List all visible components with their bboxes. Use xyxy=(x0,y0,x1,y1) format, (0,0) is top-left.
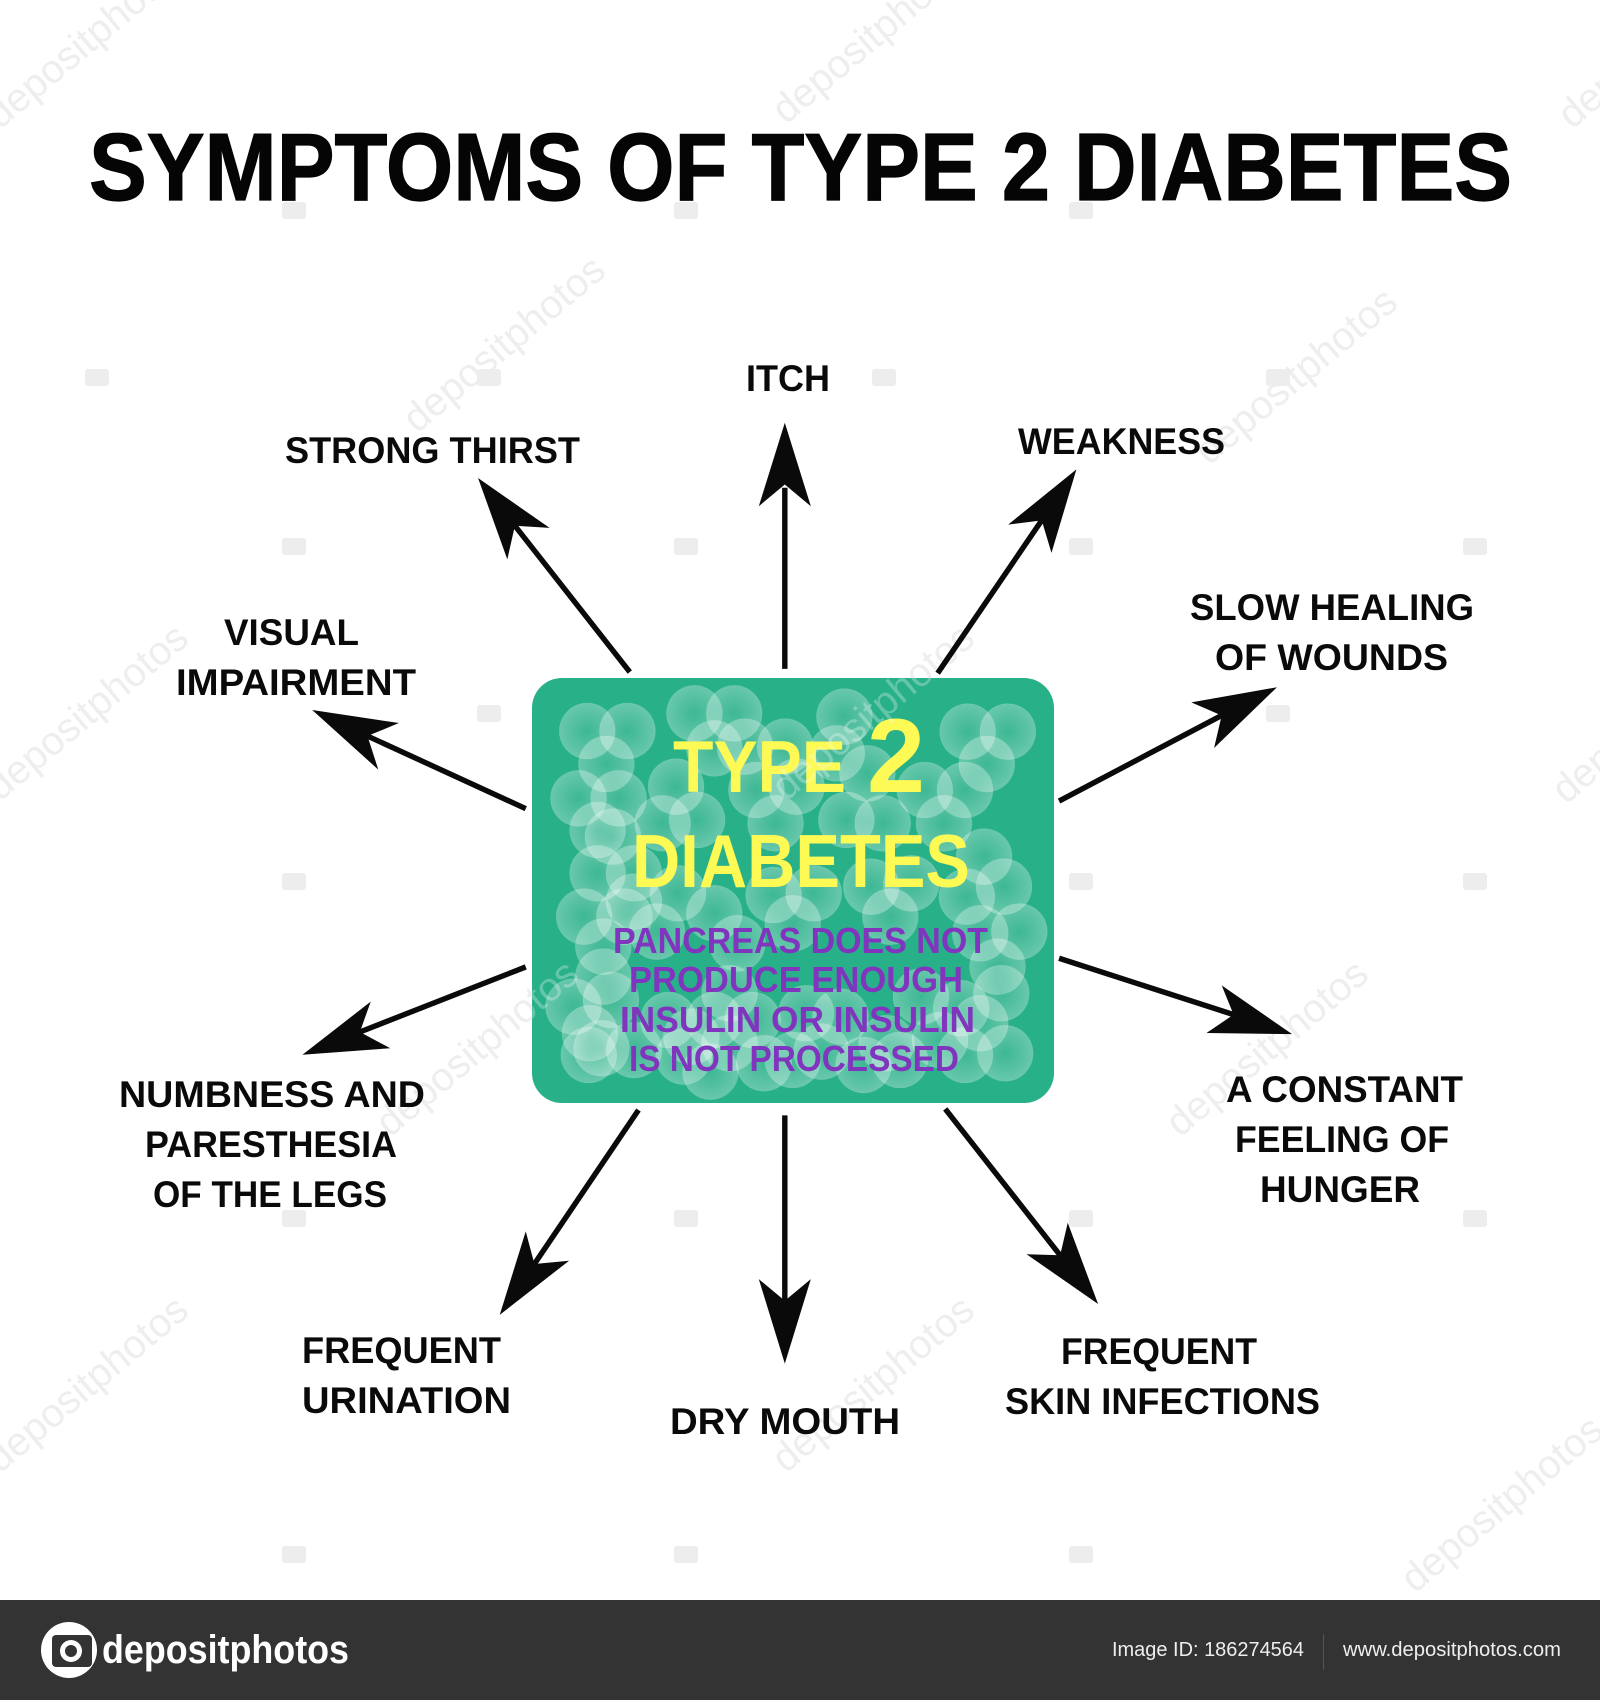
panel heading: TYPE xyxy=(673,727,846,808)
label: a constant feeling of hunger: A CONSTANT xyxy=(1226,1069,1463,1110)
watermark pattern: depositphotos xyxy=(368,951,587,1145)
label: strong thirst: STRONG THIRST xyxy=(285,430,580,471)
label: visual impairment: IMPAIRMENT xyxy=(176,662,416,703)
arrow: dry mouth xyxy=(759,1115,811,1364)
panel description xyxy=(613,920,988,1079)
label: slow healing of wounds: SLOW HEALING xyxy=(1190,587,1474,628)
icon: camera logo xyxy=(41,1622,97,1678)
label: a constant feeling of hunger: HUNGER xyxy=(1260,1169,1420,1210)
arrow: strong thirst xyxy=(478,478,630,672)
panel description: PANCREAS DOES NOT xyxy=(613,920,988,961)
label: a constant feeling of hunger: FEELING OF xyxy=(1235,1119,1449,1160)
label: a constant feeling of hunger xyxy=(1226,1069,1463,1210)
watermark pattern: depositphotos xyxy=(1187,279,1406,473)
panel heading: 2 xyxy=(867,698,925,815)
arrow: itch xyxy=(759,423,811,669)
panel watermark: depositphotos xyxy=(764,615,983,809)
panel description: PRODUCE ENOUGH xyxy=(629,959,963,1000)
label: numbness and paresthesia of the legs: OF THE LEGS xyxy=(153,1174,387,1215)
label: visual impairment: VISUAL xyxy=(224,612,359,653)
label: visual impairment xyxy=(176,612,416,703)
label: slow healing of wounds: OF WOUNDS xyxy=(1215,637,1448,678)
logo wordmark: depositphotos xyxy=(102,1628,349,1672)
panel watermark xyxy=(368,615,983,1145)
arrow: weakness xyxy=(938,469,1076,673)
label: weakness: WEAKNESS xyxy=(1018,421,1225,462)
label: numbness and paresthesia of the legs xyxy=(119,1074,425,1215)
label: frequent skin infections xyxy=(1005,1331,1320,1422)
label: frequent skin infections: FREQUENT xyxy=(1061,1331,1257,1372)
label: frequent urination xyxy=(302,1330,511,1421)
image id: Image ID: 186274564 xyxy=(1112,1639,1304,1661)
panel background xyxy=(532,678,1054,1103)
watermark pattern: depositphotos xyxy=(1158,951,1377,1145)
arrow: skin infections xyxy=(945,1109,1098,1304)
label: numbness and paresthesia of the legs: NUMBNESS AND xyxy=(119,1074,425,1115)
panel description: INSULIN OR INSULIN xyxy=(620,999,975,1040)
panel: type 2 diabetes xyxy=(532,678,1054,1103)
label: slow healing of wounds xyxy=(1190,587,1474,678)
website: www.depositphotos.com xyxy=(1342,1639,1561,1661)
arrow: frequent urination xyxy=(500,1110,638,1315)
panel watermark: depositphotos xyxy=(368,951,587,1145)
label: frequent skin infections: SKIN INFECTIONS xyxy=(1005,1381,1320,1422)
arrow: slow healing xyxy=(1059,687,1277,801)
panel heading: DIABETES xyxy=(632,819,970,903)
watermark pattern: depositphotos xyxy=(764,615,983,809)
panel heading xyxy=(632,698,970,903)
label: numbness and paresthesia of the legs: PARESTHESIA xyxy=(145,1124,397,1165)
panel description: IS NOT PROCESSED xyxy=(629,1038,959,1079)
label: dry mouth: DRY MOUTH xyxy=(670,1401,900,1442)
bokeh bubbles xyxy=(546,685,1047,1100)
label: itch: ITCH xyxy=(746,358,830,399)
label: frequent urination: FREQUENT xyxy=(302,1330,501,1371)
arrow: numbness xyxy=(302,967,526,1055)
footer bar xyxy=(0,1600,1600,1700)
arrow: hunger xyxy=(1059,958,1292,1034)
arrow: visual impairment xyxy=(312,710,526,809)
watermark pattern: depositphotos xyxy=(395,247,614,441)
label: frequent urination: URINATION xyxy=(302,1380,511,1421)
watermark pattern: depositphotos xyxy=(764,1287,983,1481)
